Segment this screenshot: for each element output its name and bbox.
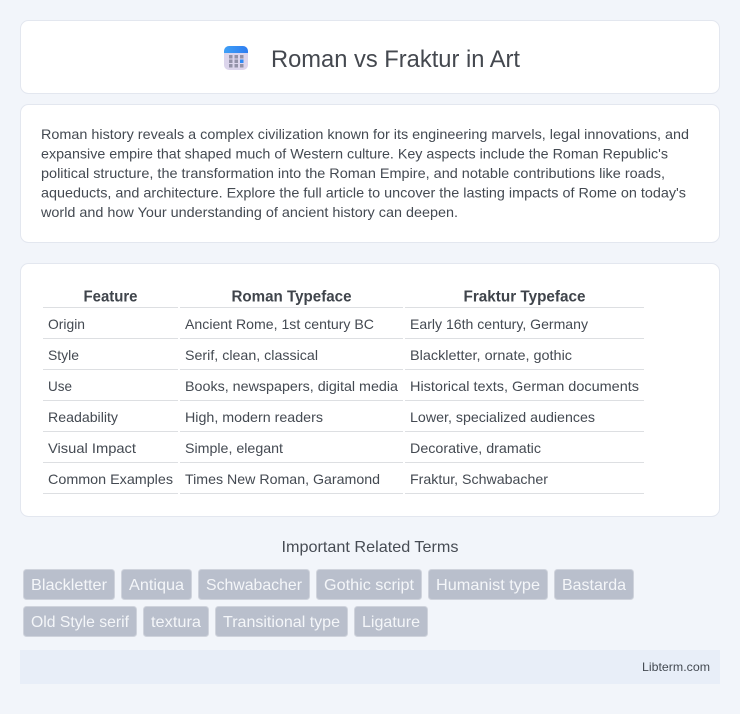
tag: Blackletter — [24, 570, 114, 600]
text block: introduction — [40, 126, 689, 220]
table row: Origin: Origin — [48, 316, 85, 332]
table header: Roman Typeface — [232, 288, 352, 306]
table row: Visual Impact: Simple, elegant — [185, 440, 283, 456]
panel: header — [20, 20, 720, 94]
tag: Gothic script — [316, 570, 422, 600]
text block: introduction: political structure, the transformation into the Roman Empire, and notable contributions like roads, — [41, 165, 665, 181]
table row: Readability: Lower, specialized audiences — [410, 409, 595, 425]
footer credit: Libterm.com — [642, 660, 710, 674]
tags: related terms — [24, 570, 634, 636]
tag: Transitional type — [216, 606, 348, 636]
table row: Use — [48, 378, 639, 394]
tag: Blackletter: Blackletter — [31, 577, 108, 594]
table header: Feature — [84, 288, 138, 306]
table row: Origin — [48, 316, 588, 332]
tag: Schwabacher: Schwabacher — [206, 577, 303, 594]
table row: Style: Style — [48, 347, 79, 363]
footer — [20, 650, 720, 684]
panel: comparison table — [20, 264, 720, 516]
table row: Use: Use — [48, 378, 72, 394]
tag: textura: textura — [151, 614, 201, 631]
tag: Bastarda: Bastarda — [562, 577, 626, 594]
tag: Humanist type — [428, 570, 548, 600]
table row: Common Examples: Common Examples — [48, 471, 173, 487]
table row: Use: Books, newspapers, digital media — [185, 378, 398, 394]
text block: introduction: world and how Your understanding of ancient history can deepen. — [40, 204, 458, 220]
tag: Transitional type: Transitional type — [223, 614, 340, 631]
table row: Visual Impact: Visual Impact — [48, 440, 136, 456]
table row: Style: Blackletter, ornate, gothic — [410, 347, 572, 363]
tag: textura — [144, 606, 208, 636]
panel: introduction — [20, 104, 720, 242]
table row: Style — [48, 347, 572, 363]
title: Roman vs Fraktur in Art — [271, 46, 520, 73]
table row: Use: Historical texts, German documents — [410, 378, 639, 394]
tag: Ligature: Ligature — [362, 614, 420, 631]
table row: Readability: High, modern readers — [185, 409, 323, 425]
tag: Antiqua — [122, 570, 192, 600]
tag: Old Style serif — [24, 606, 136, 636]
text block: introduction: Roman history reveals a complex civilization known for its engineering marvels, legal innovations, and — [41, 126, 689, 142]
table row: Common Examples — [48, 471, 548, 487]
tag: Antiqua: Antiqua — [129, 577, 184, 594]
table row: Common Examples: Fraktur, Schwabacher — [410, 471, 548, 487]
tag: Humanist type: Humanist type — [436, 577, 540, 594]
icon: calendar — [224, 46, 248, 70]
tag: Old Style serif: Old Style serif — [31, 614, 130, 631]
table row: Readability: Readability — [48, 409, 118, 425]
heading: related terms: Important Related Terms — [282, 539, 458, 556]
table row: Style: Serif, clean, classical — [185, 347, 318, 363]
table header: Fraktur Typeface — [464, 288, 586, 306]
table row: Origin: Early 16th century, Germany — [410, 316, 588, 332]
text block: introduction: aqueducts, and architecture. Explore the full article to uncover the lasting impacts of Rome on today's — [41, 184, 686, 200]
tag: Schwabacher — [198, 570, 310, 600]
table row: Visual Impact — [48, 440, 541, 456]
table header — [84, 288, 586, 306]
table row: Visual Impact: Decorative, dramatic — [410, 440, 541, 456]
tag: Bastarda — [554, 570, 634, 600]
text block: introduction: expansive empire that shaped much of Western culture. Key aspects include the Roman Republic's — [41, 146, 668, 162]
table row: Common Examples: Times New Roman, Garamond — [185, 471, 380, 487]
tag: Ligature — [354, 606, 428, 636]
table row: Readability — [48, 409, 595, 425]
table row: Origin: Ancient Rome, 1st century BC — [185, 316, 374, 332]
tag: Gothic script: Gothic script — [324, 577, 415, 594]
